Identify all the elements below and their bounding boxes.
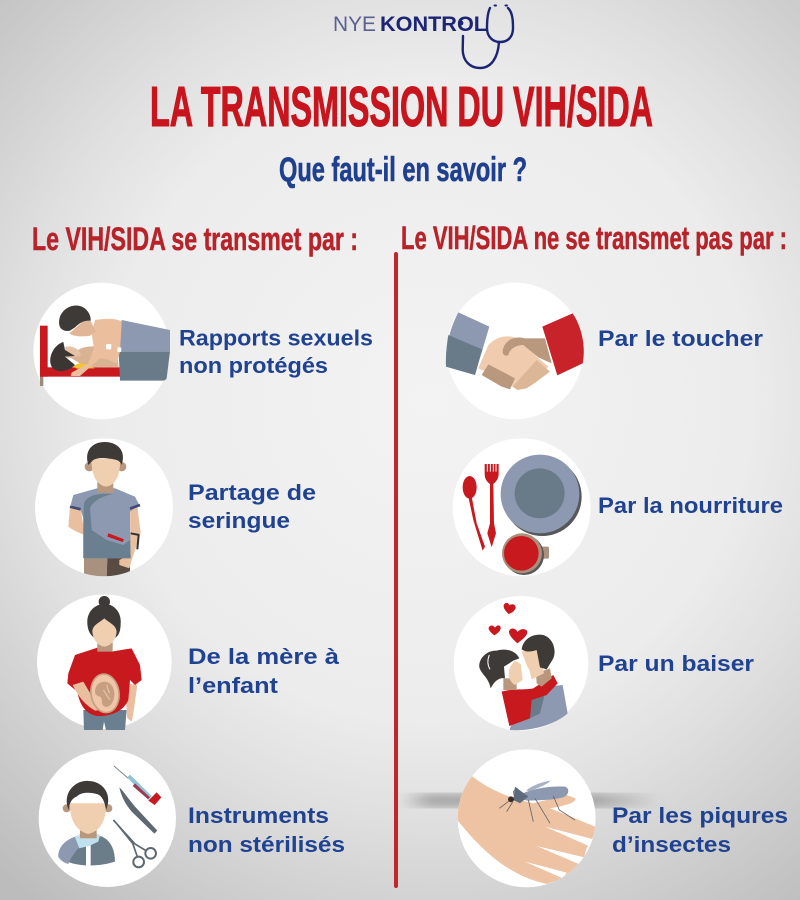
icon: man with surgical tools <box>39 750 176 887</box>
icon: plate and cutlery <box>453 438 591 576</box>
item: unsterilised instruments <box>39 750 345 887</box>
icon: handshake <box>446 283 584 419</box>
label: Partage de <box>188 480 316 505</box>
label: Par la nourriture <box>598 493 783 518</box>
logo wordmark: NYE <box>333 12 376 36</box>
label: Par les piqures <box>612 803 788 828</box>
icon: man with syringe <box>35 438 173 578</box>
label <box>612 803 788 857</box>
label: non protégés <box>179 353 328 378</box>
logo: Nye Kontrol <box>333 6 513 68</box>
item: touching <box>446 283 763 419</box>
label <box>188 480 316 533</box>
label: Par un baiser <box>598 651 754 676</box>
icon: pregnant woman <box>37 594 172 730</box>
icon: kissing couple with hearts <box>454 596 588 731</box>
label <box>179 326 373 378</box>
item: kissing <box>454 596 754 731</box>
logo wordmark <box>333 12 487 36</box>
label <box>188 644 340 698</box>
label: Par le toucher <box>598 326 763 351</box>
subtitle: Que faut-il en savoir ? <box>279 151 527 189</box>
item: unprotected sex <box>33 283 373 419</box>
label: Instruments <box>188 803 329 828</box>
item: mother to child <box>37 594 340 730</box>
label: d’insectes <box>612 832 731 857</box>
logo wordmark: KONTROL <box>380 13 487 36</box>
label: Rapports sexuels <box>179 326 373 350</box>
label: non stérilisés <box>188 832 345 857</box>
icon: mosquito on hand <box>453 749 597 887</box>
panel: left column <box>33 283 373 887</box>
label <box>188 803 345 857</box>
item: syringe sharing <box>35 438 316 578</box>
icon: couple in bed <box>33 283 170 419</box>
item: insect bites <box>453 749 788 887</box>
label: De la mère à <box>188 644 340 669</box>
item: food <box>453 438 783 576</box>
label: seringue <box>188 508 290 533</box>
icon: stethoscope <box>463 6 513 68</box>
label: l’enfant <box>188 673 279 698</box>
vertical divider line <box>394 252 398 888</box>
panel: right column <box>446 283 788 887</box>
heading: transmitted by: Le VIH/SIDA se transmet par : <box>32 221 358 257</box>
